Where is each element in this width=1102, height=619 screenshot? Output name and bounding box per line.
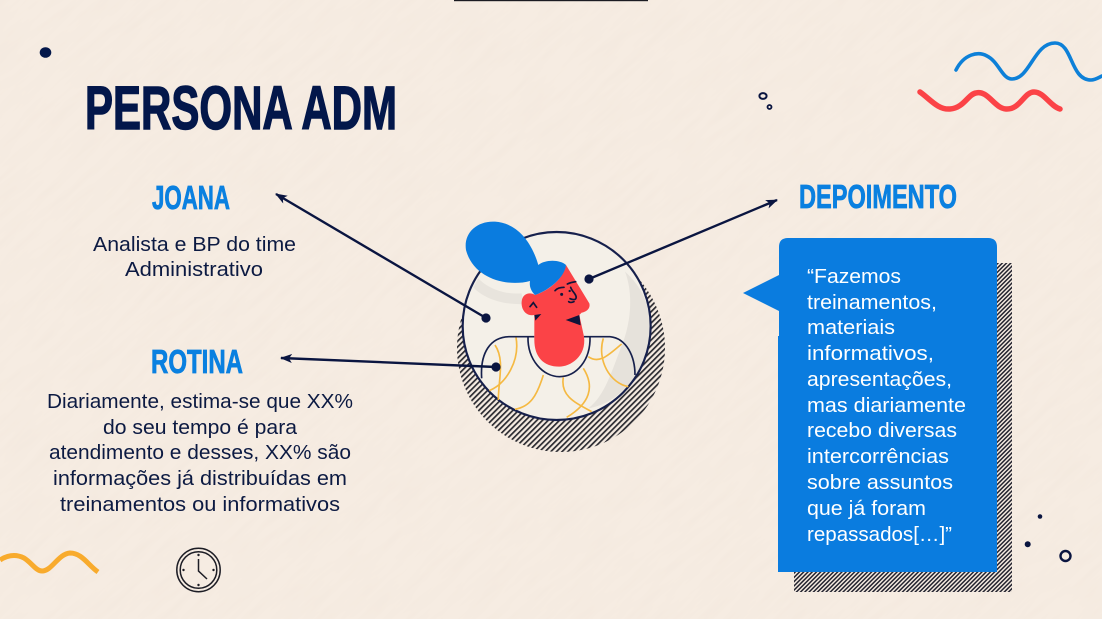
quote text: intercorrências [807, 445, 949, 468]
quote text: “Fazemos [807, 265, 901, 288]
facial features [530, 282, 576, 307]
quote text: repassados[…]” [807, 523, 952, 546]
decoration: blue squiggle [956, 43, 1102, 80]
text block: Rotina description: Diariamente, estima-se que XX% [47, 390, 353, 413]
quote text: que já foram [807, 497, 926, 520]
arrow: to Joana [276, 194, 491, 323]
quote text: informativos, [807, 342, 934, 365]
heading: Rotina: ROTINA [151, 343, 243, 380]
shirt pattern [489, 337, 628, 417]
shirt outline [481, 337, 635, 378]
illustration: persona portrait [463, 222, 651, 420]
quote text: recebo diversas [807, 419, 957, 442]
title: PERSONA ADM [85, 74, 397, 142]
icon: clock [177, 548, 220, 592]
top edge bar [454, 0, 648, 1]
arrow: to Rotina [281, 358, 501, 372]
quote text [807, 265, 966, 546]
text block: Rotina description: atendimento e desses, XX% são [49, 441, 351, 464]
decoration: red squiggle [920, 92, 1060, 109]
hair [466, 222, 566, 295]
quote text: sobre assuntos [807, 471, 953, 494]
text block: Rotina description [47, 390, 353, 516]
text block: Rotina description: do seu tempo é para [103, 416, 298, 439]
panel: speech bubble [743, 238, 997, 572]
quote text: mas diariamente [807, 394, 966, 417]
quote text: treinamentos, [807, 291, 937, 314]
text block: Joana role: Administrativo [125, 258, 263, 281]
quote text: apresentações, [807, 368, 952, 391]
face [522, 265, 590, 367]
heading: Depoimento: DEPOIMENTO [799, 178, 957, 215]
decoration: small rings [759, 93, 772, 109]
text block: Joana role: Analista e BP do time [93, 233, 296, 256]
hatch shadow: speech bubble [794, 263, 1012, 592]
portrait shading [588, 272, 650, 408]
text block: Rotina description: informações já distribuídas em [53, 467, 347, 490]
hatch shadow: portrait [457, 244, 665, 452]
decoration: top-left dot [40, 47, 51, 58]
decoration: bottom-right dots [1025, 514, 1070, 561]
text block: Rotina description: treinamentos ou informativos [60, 493, 340, 516]
text block: Joana role [93, 233, 296, 281]
arrow: to Depoimento [584, 200, 777, 284]
quote text: materiais [807, 316, 895, 339]
decoration: yellow squiggle [0, 553, 98, 572]
heading: Joana: JOANA [152, 179, 230, 216]
